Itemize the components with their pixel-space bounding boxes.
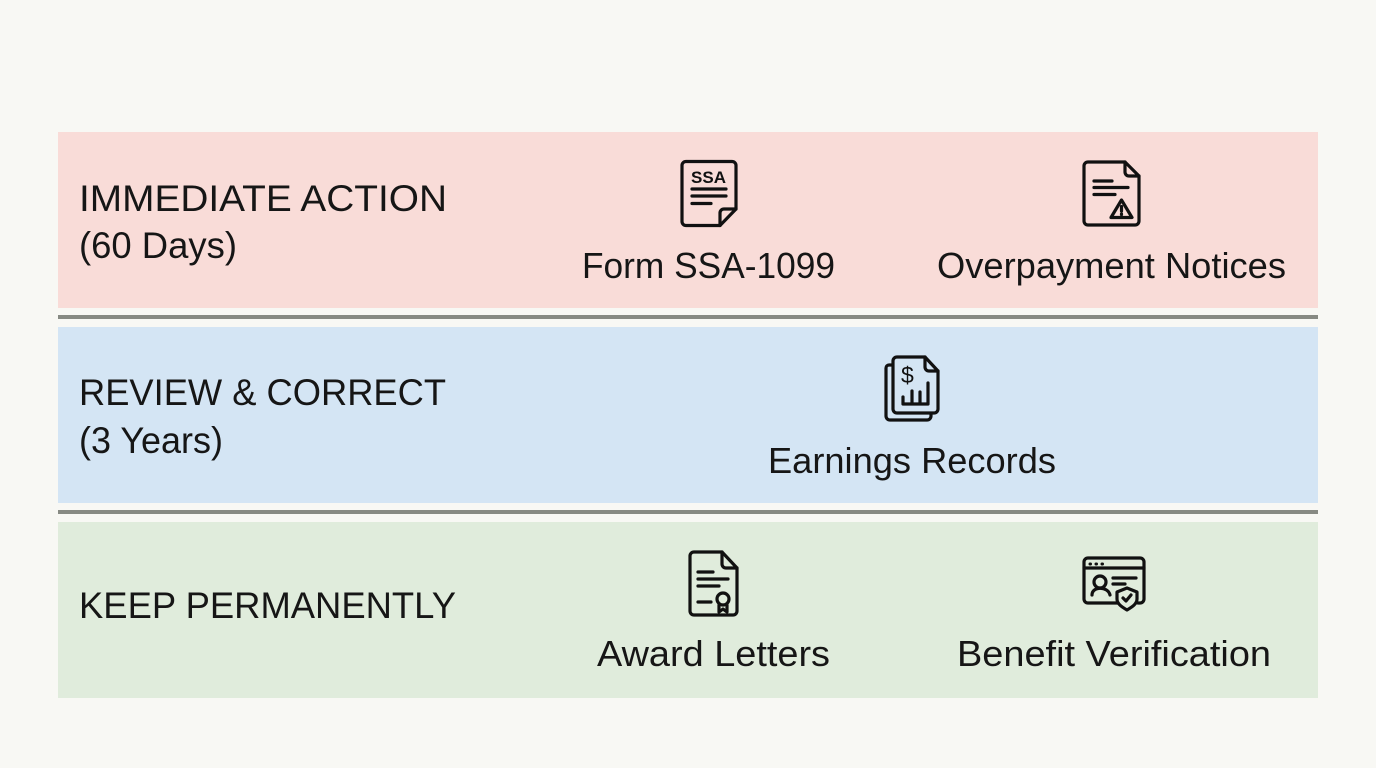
icon: form SSA document: [682, 162, 736, 226]
icon: benefit verification window with shield: [1084, 558, 1144, 610]
icon: earnings records stacked documents: [886, 357, 938, 420]
text: 60 days: (60 Days): [79, 225, 237, 266]
icon: overpayment notice document with warning: [1084, 162, 1139, 225]
icon: award letter document with seal: [690, 552, 737, 615]
panel: keep permanently: [58, 522, 1318, 698]
icon: form SSA document: SSA: [691, 168, 726, 187]
divider: [58, 315, 1318, 319]
icon: earnings records stacked documents: $: [901, 362, 914, 388]
label: overpayment notices: Overpayment Notices: [937, 245, 1286, 286]
label: earnings records: Earnings Records: [768, 440, 1056, 481]
text: 3 years: (3 Years): [79, 420, 223, 461]
label: award letters: Award Letters: [597, 633, 830, 674]
divider: [58, 510, 1318, 514]
heading: immediate action: IMMEDIATE ACTION: [79, 178, 447, 219]
heading: review and correct: REVIEW & CORRECT: [79, 372, 446, 413]
label: form SSA-1099: Form SSA-1099: [582, 245, 835, 286]
panel: review and correct: [58, 327, 1318, 503]
label: benefit verification: Benefit Verification: [957, 633, 1271, 674]
panel: immediate action: [58, 132, 1318, 308]
heading: keep permanently: KEEP PERMANENTLY: [79, 585, 456, 626]
